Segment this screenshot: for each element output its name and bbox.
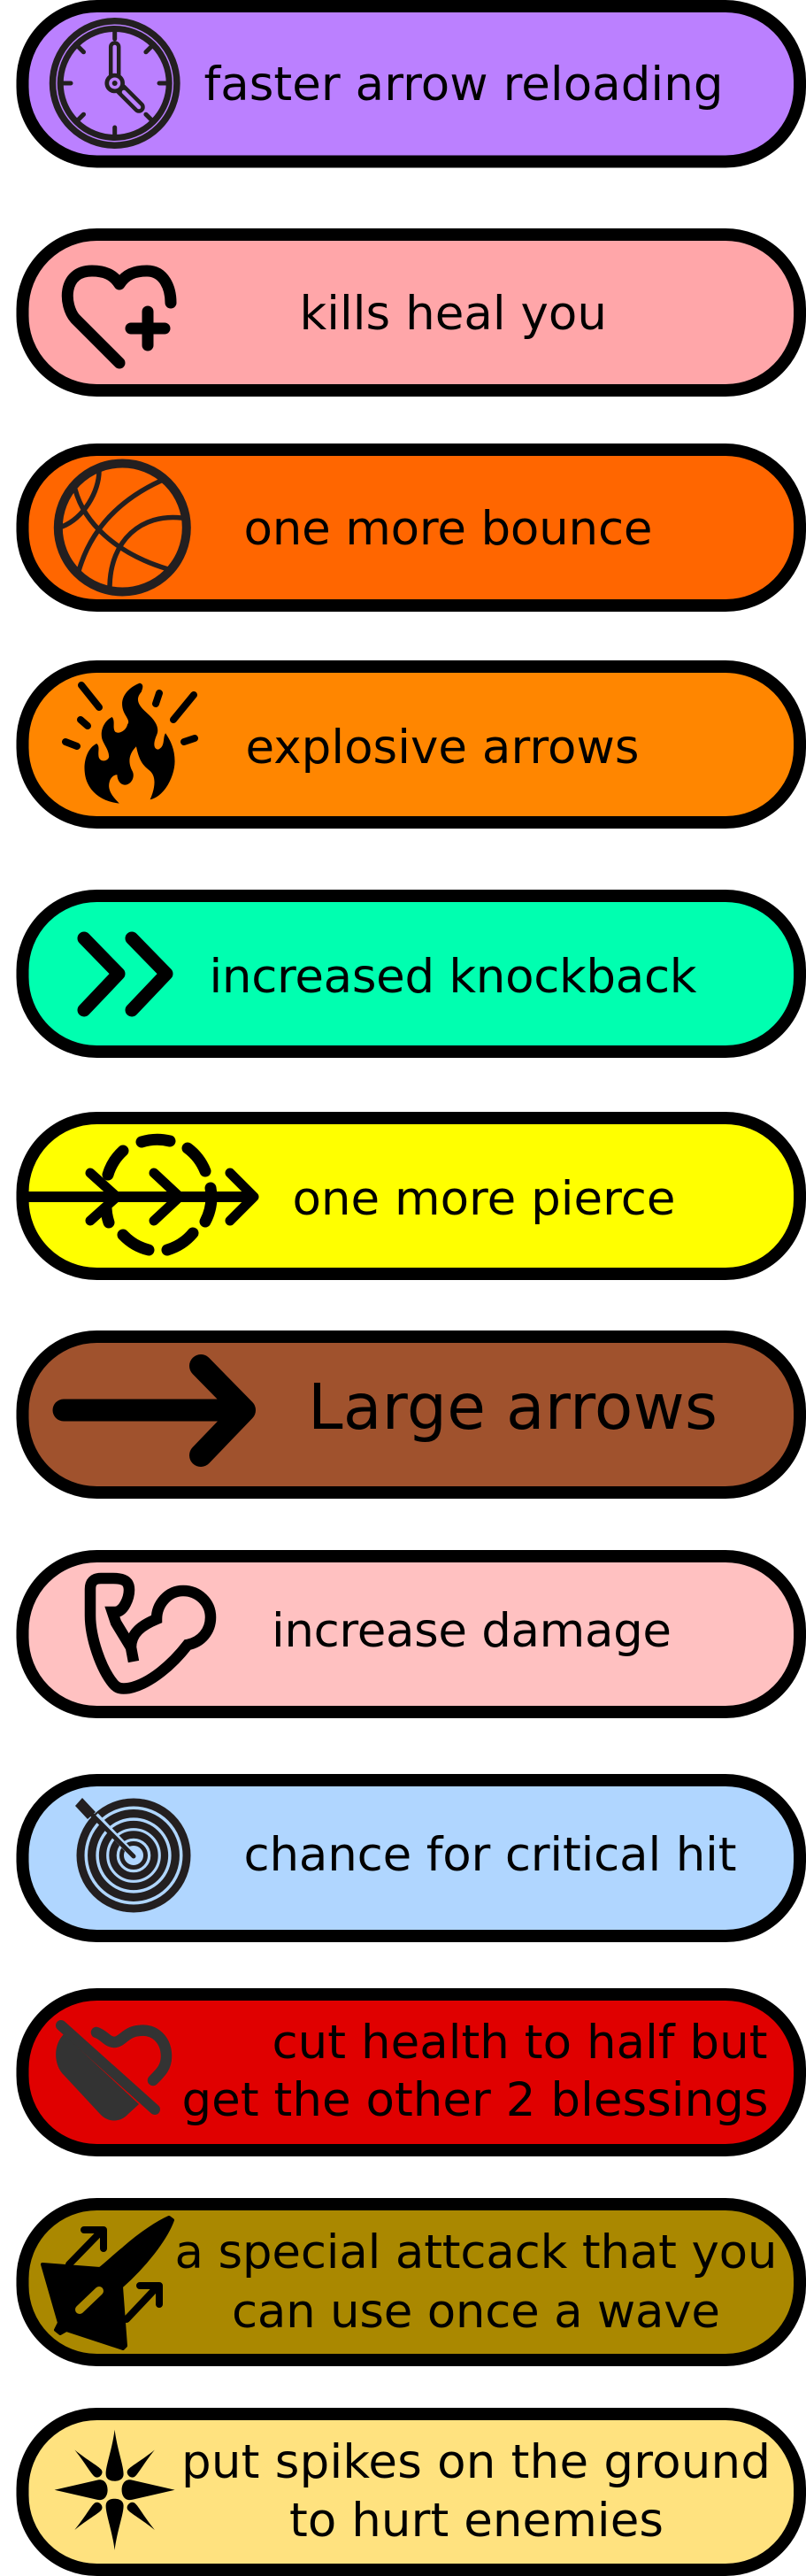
label: one more pierce (292, 1172, 676, 1226)
panel: special attack (23, 2204, 800, 2360)
icon: basketball (58, 464, 187, 591)
panel: chance for critical hit (23, 1780, 800, 1936)
label: kills heal you (299, 287, 607, 341)
label: increased knockback (209, 950, 697, 1004)
icon: heart plus (67, 271, 171, 363)
label: a special attcack that you (175, 2225, 777, 2279)
icon: large arrow (64, 1366, 244, 1455)
label: chance for critical hit (244, 1828, 736, 1882)
pill background (23, 2204, 800, 2360)
panel: kills heal you (23, 235, 800, 390)
panel: spikes (23, 2414, 800, 2570)
panel: increased knockback (23, 896, 800, 1052)
icon: clock (53, 21, 177, 145)
pill background (23, 896, 800, 1052)
label line 2: can use once a wave (232, 2285, 720, 2339)
icon: crossed-out heart (56, 2025, 166, 2121)
panel: increase damage (23, 1556, 800, 1712)
pill background (23, 6, 800, 161)
label: faster arrow reloading (203, 58, 724, 112)
panel: explosive arrows (23, 667, 800, 822)
pill background (23, 1556, 800, 1712)
icon: rocket with arrows (42, 2217, 173, 2348)
icon: flame with sparks (65, 683, 195, 804)
panel: cut health to half (23, 1994, 800, 2150)
icon: arrow piercing dashed circle (28, 1139, 254, 1250)
panel: faster arrow reloading (23, 6, 800, 161)
label: one more bounce (244, 502, 653, 556)
label: cut health to half but (273, 2016, 768, 2070)
pill background (23, 667, 800, 822)
pill background (23, 450, 800, 605)
pill background (23, 1118, 800, 1274)
panel: one more pierce (23, 1118, 800, 1274)
pill background (23, 1337, 800, 1492)
label: explosive arrows (246, 721, 639, 775)
pill background (23, 2414, 800, 2570)
icon: target with arrow (75, 1798, 187, 1909)
pill background (23, 1780, 800, 1936)
label line 2: get the other 2 blessings (182, 2073, 768, 2127)
label: increase damage (272, 1604, 672, 1658)
icon: spikes star (55, 2430, 175, 2550)
panel: one more bounce (23, 450, 800, 605)
icon: flexed bicep (90, 1578, 211, 1688)
label: Large arrows (308, 1370, 718, 1444)
label: put spikes on the ground (181, 2435, 771, 2489)
pill background (23, 1994, 800, 2150)
pill background (23, 235, 800, 390)
icon: double chevron (84, 938, 166, 1010)
label line 2: to hurt enemies (289, 2494, 664, 2548)
panel: Large arrows (23, 1337, 800, 1492)
